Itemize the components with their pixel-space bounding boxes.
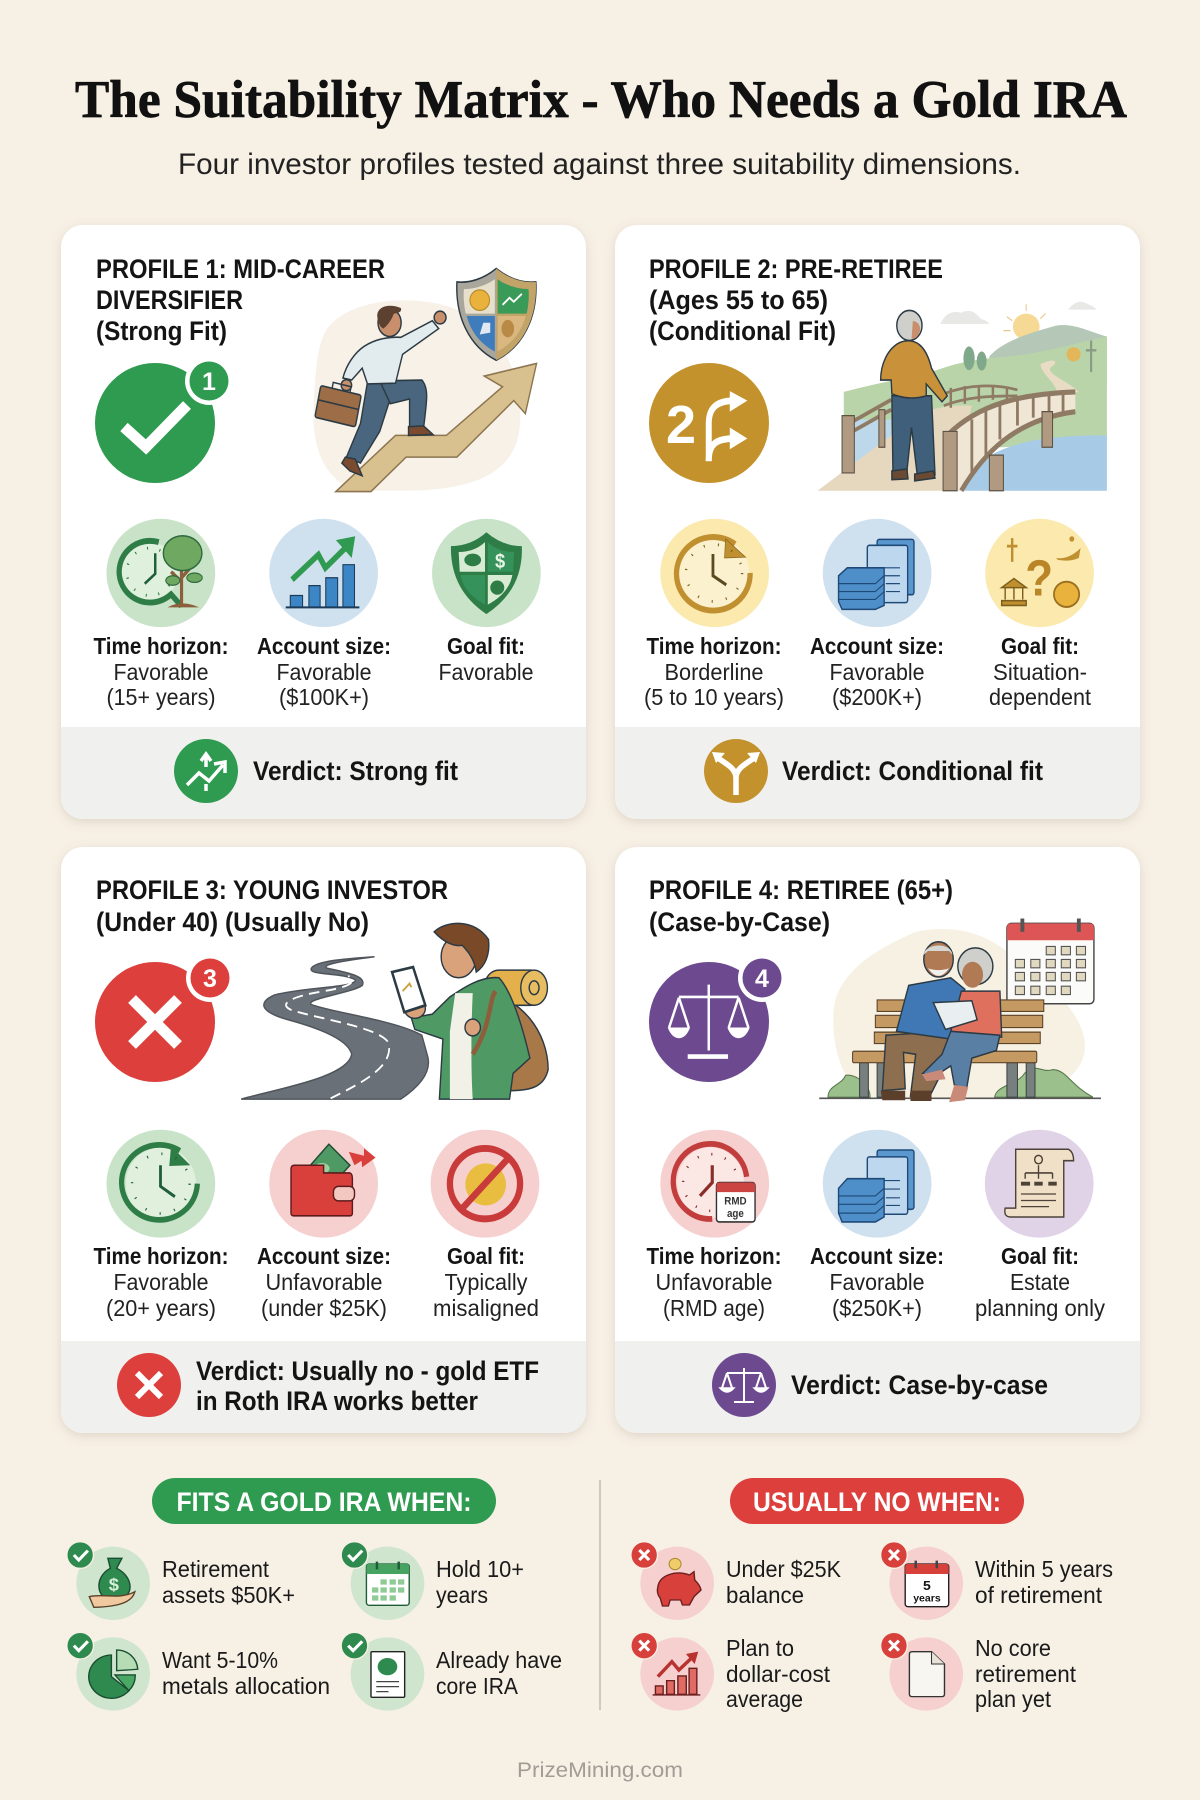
icon: gold number 2 with diverging arrows — [649, 363, 769, 483]
heading: profile 1: DIVERSIFIER — [96, 285, 243, 315]
subtitle: Four investor profiles tested against three suitability dimensions. — [178, 148, 1021, 181]
item: metals allocation: Want 5-10% — [162, 1647, 278, 1673]
item: under 25K balance: Under $25K — [726, 1556, 842, 1582]
metric: account size — [810, 519, 944, 710]
metric: time horizon: age — [727, 1209, 744, 1220]
heading: profile 2: (Ages 55 to 65) — [649, 285, 828, 315]
item: plan to dollar-cost average: Plan to — [726, 1635, 794, 1661]
verdict: usually no: in Roth IRA works better — [196, 1386, 478, 1416]
metric: time horizon — [94, 1130, 228, 1321]
item: no core retirement plan yet: plan yet — [975, 1686, 1052, 1712]
metric: goal fit: planning only — [975, 1295, 1105, 1321]
icon: red X badge: 3 — [203, 965, 217, 993]
item: metals allocation — [67, 1632, 330, 1711]
metric: goal fit: Goal fit: — [447, 1243, 525, 1269]
metric: goal fit: Goal fit: — [447, 633, 525, 659]
item: hold 10+ years: years — [436, 1582, 488, 1608]
item: already have core IRA: Already have — [436, 1647, 562, 1673]
item: retirement assets: Retirement — [162, 1556, 270, 1582]
item: no core retirement plan yet: No core — [975, 1635, 1051, 1661]
metric: account size: ($100K+) — [279, 684, 369, 710]
metric: account size — [257, 519, 391, 710]
icon: purple scales badge: 4 — [755, 965, 769, 993]
metric: account size — [810, 1130, 944, 1321]
pill heading: fits: FITS A GOLD IRA WHEN: — [176, 1487, 472, 1517]
item: plan to dollar-cost average: average — [726, 1686, 803, 1712]
metric: account size: Account size: — [810, 1243, 944, 1269]
metric: goal fit — [432, 519, 541, 685]
icon: purple scales badge — [649, 954, 786, 1082]
metric: time horizon: Time horizon: — [646, 1243, 782, 1269]
metric: goal fit: Goal fit: — [1001, 633, 1079, 659]
verdict: conditional fit — [704, 739, 1043, 803]
item: hold 10+ years — [341, 1542, 524, 1620]
metric: time horizon — [644, 519, 784, 710]
item: hold 10+ years: Hold 10+ — [436, 1556, 524, 1582]
illustration: man on bridge overlooking landscape — [817, 302, 1107, 491]
item: plan to dollar-cost average: dollar-cost — [726, 1661, 831, 1687]
verdict: case-by-case: Verdict: Case-by-case — [791, 1370, 1048, 1400]
metric: time horizon: Borderline — [664, 659, 764, 685]
item: already have core IRA — [341, 1632, 562, 1711]
item: plan to dollar-cost average — [631, 1632, 831, 1712]
item: already have core IRA: core IRA — [436, 1673, 519, 1699]
heading: profile 4 — [649, 875, 953, 937]
item: retirement assets — [67, 1542, 295, 1620]
panel: profile 4 — [615, 847, 1140, 1433]
metric: account size: Favorable — [830, 659, 924, 685]
verdict: conditional fit: Verdict: Conditional fit — [782, 756, 1043, 786]
metric: goal fit — [985, 519, 1094, 710]
metric: goal fit: Situation- — [993, 659, 1087, 685]
metric: goal fit — [431, 1130, 539, 1321]
heading: profile 1 — [96, 254, 385, 346]
panel: usually no when — [631, 1478, 1113, 1712]
pill heading: usually no: USUALLY NO WHEN: — [753, 1487, 1001, 1517]
metric: time horizon: Time horizon: — [646, 633, 782, 659]
metric: goal fit: $ — [495, 550, 505, 573]
pill heading: usually no — [730, 1478, 1024, 1524]
verdict: strong fit: Verdict: Strong fit — [253, 756, 458, 786]
verdict: usually no: Verdict: Usually no - gold ETF — [196, 1356, 539, 1386]
illustration: young hiker with phone on long winding road — [241, 923, 548, 1099]
heading: profile 3: PROFILE 3: YOUNG INVESTOR — [96, 875, 448, 905]
footer: source: PrizeMining.com — [517, 1758, 683, 1782]
item: under 25K balance — [631, 1542, 842, 1620]
metric: goal fit: dependent — [989, 684, 1091, 710]
metric: time horizon: Time horizon: — [94, 1243, 228, 1269]
metric: goal fit: Goal fit: — [1001, 1243, 1079, 1269]
item: retirement assets: assets $50K+ — [162, 1582, 295, 1608]
metric: time horizon: Favorable — [114, 1269, 208, 1295]
metric: goal fit: Estate — [1010, 1269, 1070, 1295]
metric: time horizon: (5 to 10 years) — [644, 684, 784, 710]
metric: account size: Account size: — [257, 633, 391, 659]
metric: account size: Favorable — [276, 659, 372, 685]
metric: account size: Account size: — [257, 1243, 391, 1269]
metric: account size — [257, 1130, 391, 1321]
metric: time horizon: RMD — [724, 1196, 747, 1207]
metric: goal fit: Typically — [444, 1269, 528, 1295]
metric: account size: Unfavorable — [266, 1269, 382, 1295]
item: under 25K balance: balance — [726, 1582, 804, 1608]
metric: account size: Account size: — [810, 633, 944, 659]
metric: time horizon: Favorable — [114, 659, 208, 685]
panel: profile 1 — [61, 225, 586, 819]
metric: goal fit — [975, 1130, 1105, 1321]
heading: profile 2: PROFILE 2: PRE-RETIREE — [649, 254, 943, 284]
metric: account size: ($250K+) — [832, 1295, 922, 1321]
heading: profile 4: (Case-by-Case) — [649, 907, 830, 937]
illustration: climber on rising arrow with shield — [314, 269, 537, 492]
item: within 5 years of retirement: 5 — [923, 1578, 931, 1593]
heading: profile 3: (Under 40) (Usually No) — [96, 907, 369, 937]
metric: goal fit: misaligned — [433, 1295, 539, 1321]
item: no core retirement plan yet — [881, 1632, 1077, 1712]
icon: green check badge — [95, 357, 233, 483]
verdict: strong fit — [174, 739, 458, 803]
verdict: case-by-case — [712, 1353, 1048, 1417]
metric: account size: ($200K+) — [832, 684, 922, 710]
icon: green check badge: 1 — [202, 368, 216, 396]
item: within 5 years of retirement: Within 5 years — [975, 1556, 1113, 1582]
icon: red X badge — [95, 954, 234, 1082]
metric: time horizon — [94, 519, 228, 710]
heading: profile 3 — [96, 875, 448, 937]
metric: goal fit: Favorable — [438, 659, 534, 685]
heading: profile 1: PROFILE 1: MID-CAREER — [96, 254, 385, 284]
icon: gold number 2 with diverging arrows: 2 — [666, 395, 696, 455]
item: metals allocation: metals allocation — [162, 1673, 330, 1699]
pill heading: fits — [152, 1478, 496, 1524]
metric: time horizon — [646, 1130, 782, 1321]
metric: account size: Favorable — [830, 1269, 924, 1295]
heading: profile 4: PROFILE 4: RETIREE (65+) — [649, 875, 953, 905]
metric: time horizon: Unfavorable — [656, 1269, 772, 1295]
metric: time horizon: (RMD age) — [663, 1295, 765, 1321]
item: within 5 years of retirement: of retirement — [975, 1582, 1103, 1608]
heading: profile 2: (Conditional Fit) — [649, 316, 836, 346]
item: retirement assets: $ — [109, 1575, 119, 1595]
item: within 5 years of retirement: years — [913, 1594, 941, 1604]
heading: profile 1: (Strong Fit) — [96, 316, 227, 346]
metric: time horizon: Time horizon: — [94, 633, 228, 659]
metric: account size: (under $25K) — [261, 1295, 387, 1321]
verdict: usually no — [117, 1353, 539, 1417]
heading: profile 2 — [649, 254, 943, 346]
title: The Suitability Matrix - Who Needs a Gold IRA — [75, 71, 1127, 129]
item: no core retirement plan yet: retirement — [975, 1661, 1077, 1687]
illustration: retired couple on bench with calendar — [819, 918, 1101, 1102]
item: within 5 years of retirement — [881, 1542, 1113, 1620]
panel: profile 3 — [61, 847, 586, 1433]
panel: profile 2 — [615, 225, 1140, 819]
metric: time horizon: (20+ years) — [106, 1295, 216, 1321]
panel: fits a gold IRA when — [67, 1478, 562, 1711]
metric: time horizon: (15+ years) — [106, 684, 216, 710]
metric: goal fit: ? — [1025, 550, 1053, 607]
